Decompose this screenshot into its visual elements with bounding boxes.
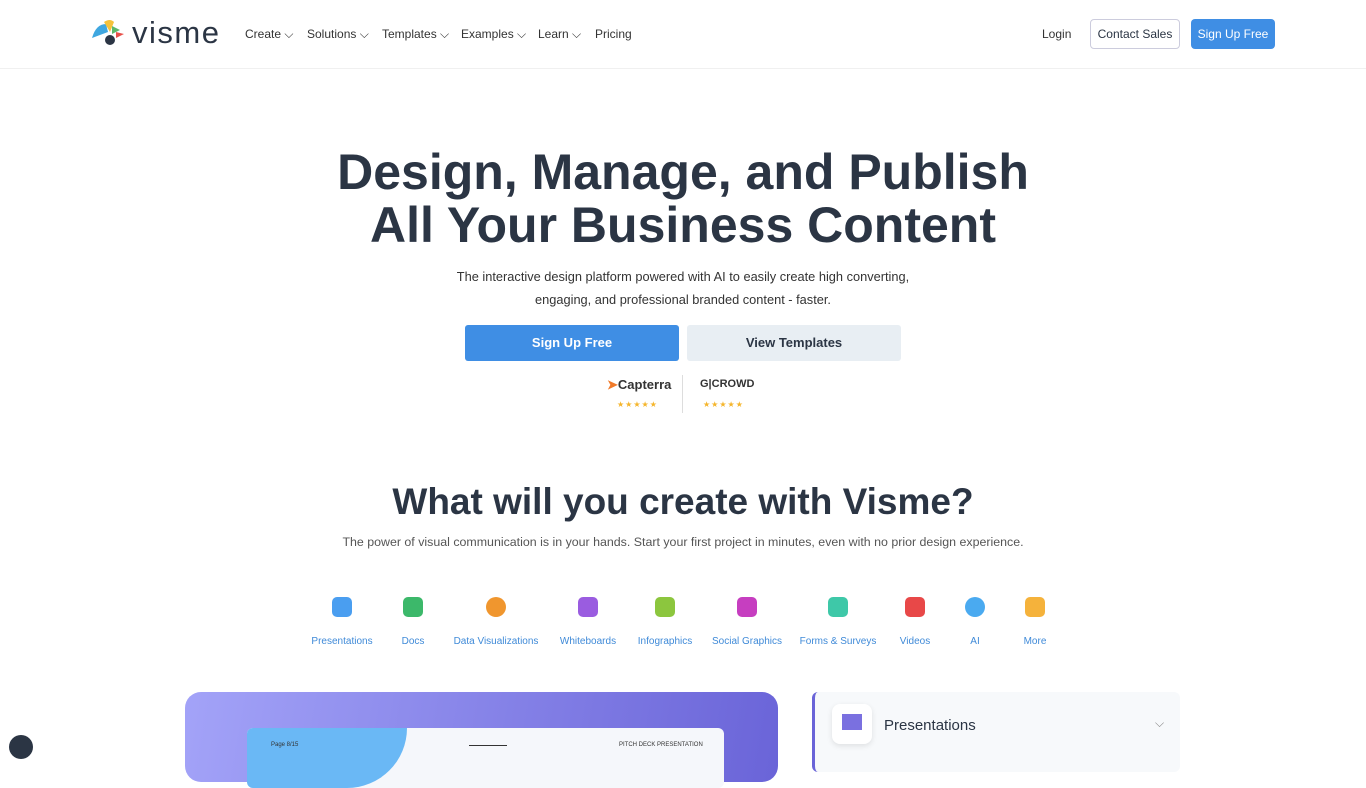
hero subtitle [457, 269, 909, 307]
category icons: Data Visualizations [454, 636, 538, 647]
preview panel: PITCH DECK PRESENTATION [619, 742, 703, 748]
header [0, 0, 1366, 69]
ratings: G|CROWD [700, 378, 754, 390]
header: Pricing [595, 27, 632, 41]
hero subtitle: engaging, and professional branded content - faster. [535, 292, 831, 307]
ratings [607, 375, 754, 413]
category icons: Presentations [311, 636, 373, 647]
hero title: All Your Business Content [370, 197, 996, 253]
ratings: ➤Capterra [607, 377, 671, 392]
header: Solutions ⌵ [307, 27, 369, 41]
hero title: Design, Manage, and Publish [337, 144, 1029, 200]
accordion: presentations [812, 692, 1180, 772]
category icons: Whiteboards [560, 636, 616, 647]
category icons: Docs [402, 636, 424, 647]
header: Create ⌵ [245, 27, 293, 41]
preview panel [185, 692, 778, 782]
category icons: More [1024, 636, 1046, 647]
header: Examples ⌵ [461, 27, 526, 41]
cta buttons: Sign Up Free [532, 335, 612, 350]
text: View Templates [746, 335, 842, 350]
section heading: What will you create with Visme? [392, 481, 974, 522]
header: Templates ⌵ [382, 27, 449, 41]
logo: visme [132, 15, 220, 50]
category icons [311, 597, 1046, 647]
accordion: presentations: Presentations [884, 717, 976, 734]
category icons: Forms & Surveys [800, 636, 876, 647]
hero title [337, 144, 1029, 253]
header: Login [1042, 27, 1071, 41]
category icons: AI [970, 636, 980, 647]
sign up button [1191, 19, 1275, 49]
section subtitle: The power of visual communication is in your hands. Start your first project in minutes, even with no prior design experience. [342, 535, 1024, 549]
accordion: presentations: ⌵ [1155, 716, 1164, 730]
cookie icon [9, 735, 33, 759]
contact sales button [1090, 19, 1180, 49]
logo [92, 15, 220, 50]
category icons: Social Graphics [712, 636, 782, 647]
header: Learn ⌵ [538, 27, 581, 41]
preview panel: Page 8/15 [271, 742, 298, 748]
hero subtitle: The interactive design platform powered with AI to easily create high converting, [457, 269, 909, 284]
category icons: Infographics [638, 636, 692, 647]
category icons: Videos [900, 636, 930, 647]
ratings: ★★★★★ [703, 400, 744, 409]
contact sales button: Contact Sales [1098, 27, 1172, 41]
cta buttons [465, 325, 679, 361]
sign up button: Sign Up Free [1198, 27, 1268, 41]
nav links [245, 27, 1071, 41]
ratings: ★★★★★ [617, 400, 658, 409]
